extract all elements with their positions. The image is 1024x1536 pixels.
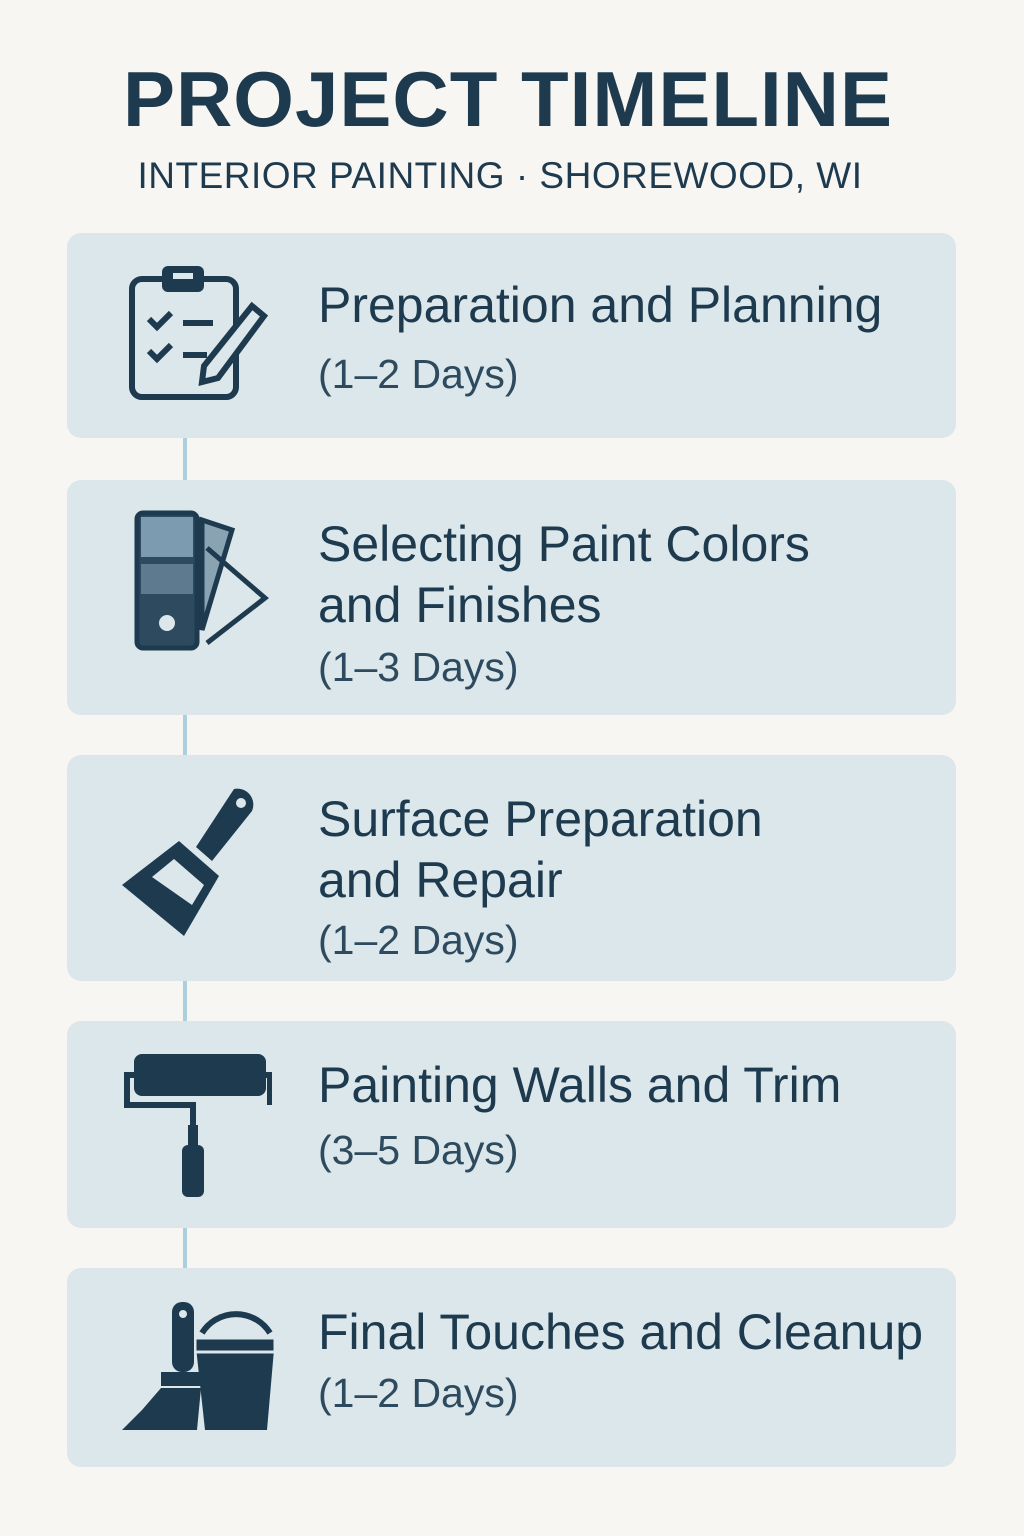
text: step 2: and Finishes (318, 577, 602, 633)
text: step 3: Surface Preparation (318, 791, 763, 847)
icon: brush and bucket (122, 1302, 274, 1430)
text: step 5: Final Touches and Cleanup (318, 1304, 923, 1360)
panel: step 4 (67, 1021, 956, 1228)
panel: step 2: (1–3 Days) (318, 644, 519, 690)
icon: putty knife (122, 788, 254, 936)
panel: step 5 (67, 1268, 956, 1467)
icon: color swatches (134, 510, 269, 650)
text: step 3 (318, 791, 763, 908)
title: PROJECT TIMELINE (123, 55, 893, 143)
icon: clipboard (129, 266, 268, 400)
panel: step 1 (67, 233, 956, 438)
panel: step 1: (1–2 Days) (318, 351, 519, 397)
text: step 2: Selecting Paint Colors (318, 516, 810, 572)
panel: step 4: (3–5 Days) (318, 1127, 519, 1173)
icon: paint roller (124, 1054, 272, 1197)
subtitle: INTERIOR PAINTING · SHOREWOOD, WI (138, 155, 862, 196)
text: step 1: Preparation and Planning (318, 277, 882, 333)
panel: step 3 (67, 755, 956, 981)
text: step 4: Painting Walls and Trim (318, 1057, 841, 1113)
panel: step 3: (1–2 Days) (318, 917, 519, 963)
text: step 3: and Repair (318, 852, 563, 908)
panel: step 5: (1–2 Days) (318, 1370, 519, 1416)
panel: step 2 (67, 480, 956, 715)
text: step 2 (318, 516, 810, 633)
